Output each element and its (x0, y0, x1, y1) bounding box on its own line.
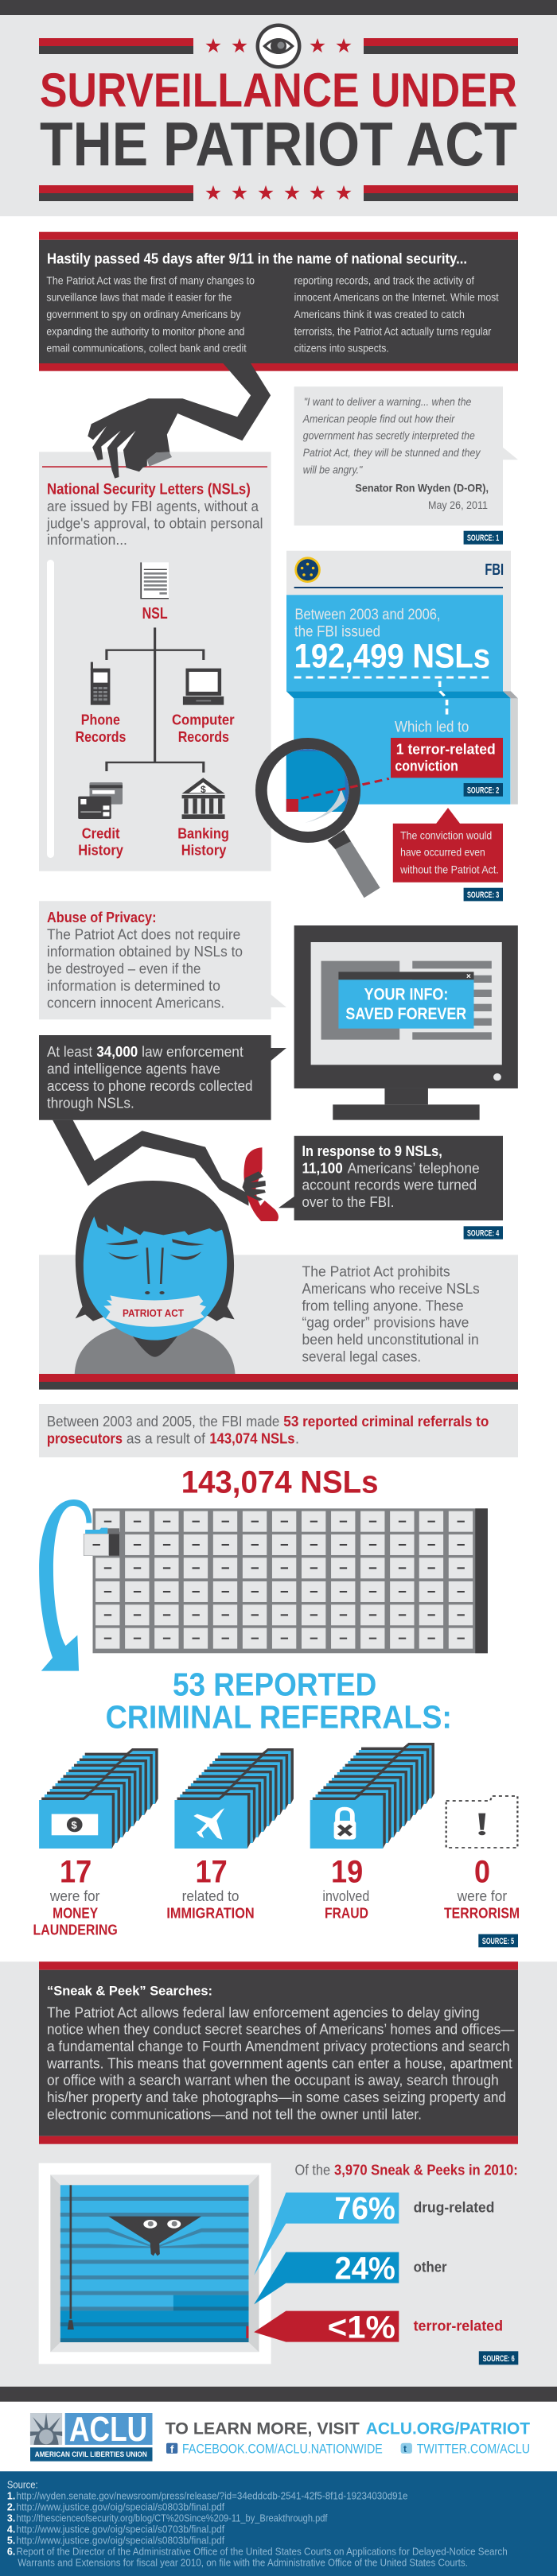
callout: 76% drug-related: drug-related (414, 2200, 494, 2216)
icon: lock (334, 1809, 356, 1840)
white side bar (47, 560, 54, 858)
callout: under 1% terror-related: terror-related (414, 2318, 503, 2334)
icon: monitor with popup: × (466, 972, 471, 981)
icon: magnifying glass (255, 738, 389, 898)
stat: 0 terrorism: 0 (474, 1854, 490, 1889)
source references: http://www.justice.gov/oig/special/s0803b/final.pdf (16, 2535, 225, 2546)
callout: 24% other: other (414, 2260, 447, 2275)
quote text: "I want to deliver a warning... when the (304, 395, 472, 408)
panel: FBI referrals summary: 143,074 NSLs (209, 1430, 294, 1446)
gag order text: several legal cases. (302, 1348, 421, 1364)
NSL description (46, 499, 263, 548)
intro body text: surveillance laws that made it easier for the (46, 291, 232, 304)
source badge 4: SOURCE: 4 (467, 1229, 500, 1239)
blue upper sheet (286, 595, 503, 691)
stat: 17 money laundering: LAUNDERING (33, 1922, 118, 1938)
heading: 3,970 sneak and peeks: 3,970 Sneak & Peeks in 2010: (334, 2162, 518, 2178)
panel: sources: Source: (7, 2479, 38, 2490)
label: credit history: History (78, 843, 123, 859)
face (84, 1216, 227, 1340)
quote attribution: May 26, 2011 (428, 499, 488, 511)
panel: FBI referrals summary: prosecutors (47, 1430, 123, 1446)
abuse text: concern innocent Americans. (47, 995, 224, 1011)
source numbers: 6. (7, 2546, 15, 2557)
navy rule (294, 587, 503, 588)
open drawer (84, 1528, 119, 1556)
abuse text: information is determined to (47, 978, 220, 994)
panel: title header (0, 15, 557, 216)
icon: NSL document (140, 562, 169, 599)
arrow: curved blue arrow (39, 1499, 92, 1671)
quote text (302, 395, 481, 475)
brows and eyes (106, 1239, 204, 1294)
dashed connector (294, 677, 491, 718)
source badge 2 (464, 783, 503, 797)
panel: sneak and peek (39, 1961, 518, 2144)
top left bar (39, 38, 193, 54)
icon: bank (182, 778, 225, 819)
which led to: Which led to (395, 720, 469, 736)
gag order text: from telling anyone. These (302, 1298, 464, 1313)
source references: Warrants and Extensions for fiscal year 2010, on file with the Administrative Office of the United States Courts. (18, 2557, 468, 2568)
label: computer records (172, 712, 235, 745)
hand thumb shadow (147, 452, 172, 467)
FBI label: FBI (485, 561, 504, 579)
source badge 1 (464, 531, 503, 545)
panel: quote (294, 386, 518, 526)
ACLU name band (30, 2447, 153, 2462)
label: credit history: Credit (82, 825, 119, 841)
sneak body: his/her property and take photographs—in some cases seizing property and (47, 2089, 506, 2105)
stat: 0 terrorism: TERRORISM (444, 1905, 520, 1921)
agents text: access to phone records collected (47, 1078, 253, 1094)
source badge 3 (464, 888, 503, 901)
panel: FBI referrals summary: as a result of (127, 1430, 206, 1446)
peeking figure (108, 2217, 201, 2256)
learn more text: ACLU.ORG/PATRIOT (366, 2420, 530, 2438)
NSL description: information... (47, 532, 127, 548)
callout: 76% drug-related: 76% (334, 2191, 395, 2226)
icon: bill (52, 1814, 98, 1835)
icon: twitter (401, 2443, 412, 2454)
sneak body: or office with a search warrant when the occupant is away, search through (47, 2073, 499, 2089)
bottom stars (205, 185, 352, 200)
source numbers: 4. (7, 2524, 15, 2535)
icon: exclamation mark (478, 1814, 485, 1835)
heading: 3,970 sneak and peeks: Of the (294, 2162, 330, 2178)
source references: http://www.justice.gov/oig/special/s0703b/final.pdf (16, 2524, 225, 2535)
red conviction box (391, 738, 503, 778)
chart: filing cabinet of NSLs (84, 1508, 488, 1653)
callout: conviction note: without the Patriot Act. (399, 863, 499, 875)
icon: monitor with popup (294, 925, 518, 1120)
response text (302, 1143, 480, 1210)
sneak body: electronic communications—and not tell the owner until later. (47, 2106, 422, 2122)
panel: national security letters (39, 452, 271, 871)
gripping hand (242, 1171, 266, 1201)
stat: 19 fraud: involved (322, 1888, 369, 1904)
icon: red telephone handset (242, 1147, 278, 1221)
hair (76, 1181, 235, 1321)
FBI intro text: Between 2003 and 2006, (294, 607, 441, 623)
quote attribution: Senator Ron Wyden (D-OR), (355, 482, 489, 495)
label: phone records (76, 712, 126, 745)
bottom left bar (39, 185, 193, 201)
section background: sneak and peek (0, 1961, 557, 2386)
tape text: PATRIOT ACT (123, 1307, 184, 1319)
top right bar (364, 38, 518, 54)
label: credit history (78, 825, 123, 859)
label: banking history (177, 825, 229, 859)
panel: FBI referrals summary: . (295, 1430, 299, 1446)
big number 192,499 NSLs: 192,499 NSLs (294, 637, 490, 675)
source badge 4 (464, 1226, 503, 1240)
stat: 17 money laundering: were for (49, 1888, 99, 1904)
neck (131, 1334, 179, 1357)
source badge 2: SOURCE: 2 (467, 786, 499, 795)
source badge 5: SOURCE: 5 (482, 1937, 514, 1946)
label: computer records: Computer (172, 712, 235, 728)
intro body text: terrorists, the Patriot Act actually turns regular (294, 324, 492, 337)
icon: facebook (166, 2443, 177, 2455)
callout: under 1% terror-related (254, 2310, 503, 2345)
stat: 17 immigration: IMMIGRATION (166, 1905, 255, 1921)
intro body text: Americans think it was created to catch (294, 308, 465, 320)
agents text: through NSLs. (47, 1095, 134, 1111)
stat: 19 fraud: 19 (331, 1854, 363, 1889)
source numbers (7, 2490, 15, 2557)
label: computer records: Records (178, 729, 229, 745)
header band (0, 0, 557, 15)
source references (16, 2490, 508, 2568)
stat: 17 money laundering: MONEY (53, 1905, 98, 1921)
source badge 6: SOURCE: 6 (483, 2354, 515, 2364)
source references: http://wyden.senate.gov/newsroom/press/release/?id=34eddcdb-2541-42f5-8f1d-19234030d91e (16, 2490, 408, 2501)
gag order text: The Patriot Act prohibits (302, 1264, 450, 1280)
stat: 17 immigration (166, 1854, 255, 1921)
icon: bank: $ (201, 784, 206, 795)
facebook link text: FACEBOOK.COM/ACLU.NATIONWIDE (182, 2442, 383, 2457)
abuse text (47, 927, 243, 1011)
intro body text: reporting records, and track the activity of (294, 274, 474, 286)
response text: In response to 9 NSLs, (302, 1143, 442, 1159)
stat: 0 terrorism: were for (457, 1888, 507, 1904)
ACLU blue box (65, 2413, 153, 2445)
stat: 17 money laundering: 17 (60, 1854, 92, 1889)
twitter link text: TWITTER.COM/ACLU (417, 2442, 530, 2457)
icon: credit cards (78, 782, 123, 819)
gag order text: been held unconstitutional in (302, 1332, 479, 1348)
icon: phone (91, 662, 110, 705)
abuse text: The Patriot Act does not require (47, 927, 240, 943)
paper fold (286, 691, 518, 805)
source references: Report of the Director of the Administrative Office of the United States Courts on Applications for Delayed-Notice Search (16, 2546, 508, 2557)
FBI intro text: the FBI issued (294, 623, 380, 640)
source badge 5 (478, 1934, 518, 1947)
tape (103, 1295, 206, 1327)
quote text: will be angry." (303, 463, 363, 475)
folder stack: immigration (174, 1748, 294, 1849)
callout: 24% other: 24% (334, 2251, 395, 2286)
tree diagram lines (107, 627, 204, 773)
source numbers: 1. (7, 2490, 15, 2501)
response text: 11,100 (302, 1160, 343, 1176)
intro body text: expanding the authority to monitor phone and (46, 324, 244, 337)
sneak body: notice when they conduct secret searches of Americans’ homes and offices— (47, 2022, 514, 2038)
label: phone records: Phone (81, 712, 120, 728)
source references: http://www.justice.gov/oig/special/s0803b/final.pdf (16, 2501, 225, 2512)
FBI intro text (294, 607, 441, 640)
panel: abuse of privacy (39, 901, 286, 1019)
sneak body (46, 2004, 514, 2122)
source references: http://thescienceofsecurity.org/blog/CT%20Since%209-11_by_Breakthrough.pdf (16, 2512, 328, 2524)
icon: ACLU logo (30, 2410, 153, 2462)
intro body text: innocent Americans on the Internet. While most (294, 291, 499, 304)
response text: account records were turned (302, 1177, 477, 1193)
folder stack: fraud (310, 1743, 434, 1849)
heading: 53 reported criminal referrals: CRIMINAL REFERRALS: (106, 1698, 452, 1735)
learn more text (166, 2420, 530, 2438)
callout: under 1% terror-related: <1% (328, 2310, 395, 2345)
panel: FBI (286, 551, 518, 805)
panel: FBI referrals summary: Between 2003 and 2005, the FBI made (47, 1414, 279, 1430)
callout: conviction note (393, 808, 503, 883)
top stars (205, 38, 352, 52)
panel: intro (39, 232, 518, 371)
heading: 143,074 NSLs: 143,074 NSLs (181, 1465, 379, 1499)
abuse heading: Abuse of Privacy: (47, 910, 156, 925)
panel: gag order (39, 1255, 518, 1390)
sneak body: The Patriot Act allows federal law enforcement agencies to delay giving (47, 2004, 480, 2020)
statue of liberty (30, 2413, 62, 2445)
icon: reaching arm and hand (88, 363, 271, 479)
agents text: At least (47, 1044, 92, 1060)
heading: 53 reported criminal referrals (106, 1666, 452, 1735)
response text: over to the FBI. (302, 1194, 395, 1210)
shoulders (75, 1326, 236, 1374)
quote text: American people find out how their (302, 412, 456, 425)
sneak body: a fundamental change to Fourth Amendment privacy protections and search (47, 2039, 510, 2054)
panel: response to NSLs (278, 1136, 503, 1220)
agents text: law enforcement (142, 1044, 243, 1060)
intro body text: citizens into suspects. (294, 342, 389, 355)
label: banking history: History (181, 843, 226, 859)
quote text: government has secretly interpreted the (303, 429, 475, 442)
agents text: and intelligence agents have (47, 1061, 220, 1077)
icon: phone cord arm (53, 1120, 248, 1206)
stat: 17 money laundering (33, 1854, 118, 1938)
callout: conviction note: The conviction would (400, 828, 492, 841)
source badge 1: SOURCE: 1 (467, 533, 499, 543)
abuse text: be destroyed – even if the (47, 961, 201, 977)
ACLU wordmark: ACLU (69, 2410, 147, 2449)
NSL description: judge's approval, to obtain personal (46, 515, 263, 531)
intro body text: The Patriot Act was the first of many changes to (46, 274, 255, 286)
gag order text: “gag order” provisions have (302, 1315, 469, 1331)
callout: 76% drug-related (254, 2191, 494, 2275)
title (40, 64, 517, 179)
source numbers: 3. (7, 2512, 15, 2524)
stat: 0 terrorism (444, 1854, 520, 1921)
source badge 3: SOURCE: 3 (467, 890, 499, 900)
panel: sources (0, 2471, 557, 2576)
quote attribution (355, 482, 489, 511)
source badge 6 (479, 2351, 518, 2365)
intro body text: government to spy on ordinary Americans by (46, 308, 241, 320)
sneak body: warrants. This means that government agents can enter a house, apartment (46, 2055, 512, 2071)
learn more text: TO LEARN MORE, VISIT (166, 2420, 360, 2438)
red conviction box: conviction (395, 758, 458, 774)
red conviction box: 1 terror-related (396, 741, 496, 757)
source numbers: 5. (7, 2535, 15, 2546)
NSL description: are issued by FBI agents, without a (47, 499, 259, 514)
stat: 19 fraud: FRAUD (325, 1905, 368, 1921)
popup text: SAVED FOREVER (345, 1005, 466, 1023)
stat: 17 immigration: related to (182, 1888, 239, 1904)
sneak heading: “Sneak & Peek” Searches: (47, 1983, 212, 1998)
icon: facebook: f (170, 2443, 174, 2455)
NSL heading: National Security Letters (NSLs) (47, 482, 251, 499)
ACLU name band: AMERICAN CIVIL LIBERTIES UNION (35, 2450, 147, 2458)
icon: airplane (193, 1808, 224, 1840)
footer band (0, 2387, 557, 2402)
abuse text: information obtained by NSLs to (47, 944, 243, 960)
label: banking history: Banking (177, 825, 229, 841)
response text: Americans’ telephone (348, 1160, 480, 1176)
intro body text: email communications, collect bank and credit (46, 342, 247, 355)
quote text: Patriot Act, they will be stunned and they (303, 446, 481, 459)
gag order text (302, 1264, 480, 1364)
FBI seal (294, 557, 321, 583)
panel: FBI referrals summary (39, 1404, 518, 1457)
panel: FBI referrals summary: 53 reported criminal referrals to (283, 1414, 489, 1430)
popup text: YOUR INFO: (364, 985, 448, 1003)
icon: window with blinds (39, 2163, 271, 2364)
callout: conviction note: have occurred even (400, 846, 485, 859)
panel: agents with access (39, 1035, 286, 1120)
source numbers: 2. (7, 2501, 15, 2512)
icon: computer (183, 669, 224, 705)
callout: 24% other (254, 2251, 447, 2304)
label: phone records: Records (76, 729, 126, 745)
red rule (42, 466, 267, 467)
label NSL: NSL (142, 605, 168, 623)
stat: 19 fraud (322, 1854, 369, 1921)
icon: gagged woman (75, 1181, 236, 1374)
icon: twitter: t (403, 2443, 407, 2454)
heading: 53 reported criminal referrals: 53 REPORTED (173, 1666, 376, 1703)
folder stack: money laundering (39, 1748, 158, 1849)
bottom right bar (364, 185, 518, 201)
popup text (345, 985, 466, 1023)
icon: eye (256, 24, 301, 68)
intro heading: Hastily passed 45 days after 9/11 in the name of national security... (47, 251, 467, 267)
stat: 17 immigration: 17 (196, 1854, 228, 1889)
dollar sign: $ (72, 1819, 78, 1831)
agents text (47, 1044, 253, 1111)
intro body text (46, 274, 499, 355)
folder outline: terrorism (446, 1796, 517, 1848)
agents text: 34,000 (96, 1044, 138, 1060)
gag order text: Americans who receive NSLs (302, 1281, 480, 1297)
